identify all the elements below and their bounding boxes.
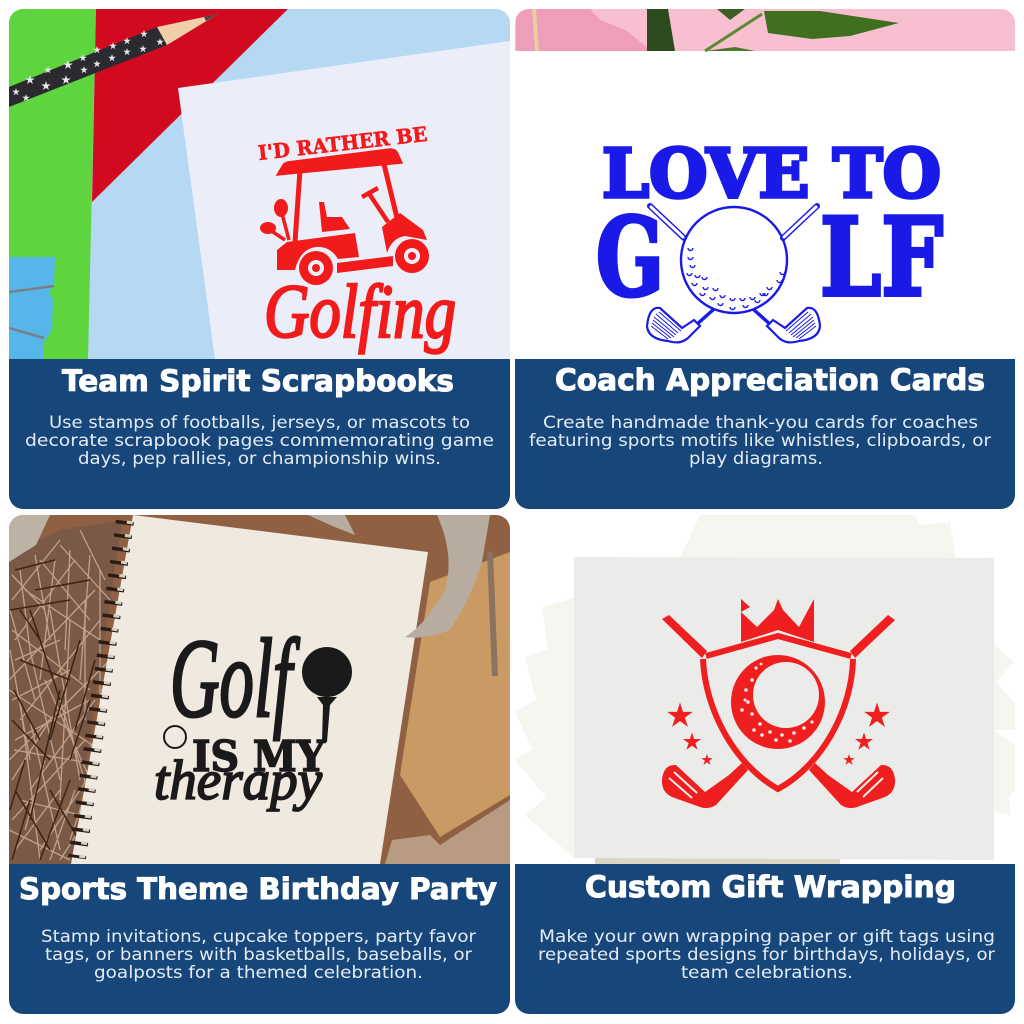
icon: stars bbox=[667, 702, 890, 765]
stamp: golf crest bbox=[662, 599, 895, 808]
description: play diagrams. bbox=[689, 448, 823, 468]
panel: sports theme birthday party bbox=[9, 515, 510, 1014]
notebook bbox=[71, 515, 428, 864]
stamp: love to golf bbox=[596, 134, 943, 342]
photo: card with love to golf stamp bbox=[515, 9, 1015, 359]
panel: coach appreciation cards bbox=[515, 9, 1015, 509]
stamp text: Golfing: Golfing bbox=[264, 270, 456, 354]
speckled ground below envelope bbox=[385, 800, 510, 864]
stacked cards bbox=[515, 515, 1015, 864]
description: team celebrations. bbox=[681, 962, 853, 982]
icon: club heads bbox=[662, 763, 895, 808]
description: Create handmade thank-you cards for coaches bbox=[543, 412, 978, 432]
heading: Coach Appreciation Cards bbox=[555, 363, 985, 397]
description bbox=[25, 412, 494, 468]
icon: small golf ball bbox=[164, 726, 186, 748]
description: goalposts for a themed celebration. bbox=[94, 962, 423, 982]
caption band bbox=[515, 359, 1015, 509]
heading: Sports Theme Birthday Party bbox=[19, 872, 497, 906]
kraft envelope bbox=[400, 552, 510, 837]
stamp text: G: G bbox=[596, 195, 664, 321]
description: decorate scrapbook pages commemorating game bbox=[25, 430, 494, 450]
description bbox=[529, 412, 991, 468]
stamp text: therapy: therapy bbox=[154, 750, 322, 812]
stamp text: LOVE TO: LOVE TO bbox=[602, 134, 941, 213]
photo: stationery with golf cart stamp bbox=[9, 9, 510, 359]
caption band bbox=[515, 864, 1015, 1014]
photo: notebook on wood with golf stamp bbox=[9, 515, 510, 864]
stamp: I'd rather be golfing bbox=[257, 122, 456, 354]
icon: crossed golf clubs bbox=[647, 206, 820, 342]
description: Stamp invitations, cupcake toppers, party favor bbox=[41, 926, 476, 946]
icon: golf ball bbox=[681, 207, 787, 313]
description bbox=[41, 926, 476, 982]
description: days, pep rallies, or championship wins. bbox=[78, 448, 441, 468]
description: featuring sports motifs like whistles, clipboards, or bbox=[529, 430, 991, 450]
stamp text: IS MY: IS MY bbox=[192, 732, 326, 781]
caption band bbox=[9, 864, 510, 1014]
icon: golf ball crescent bbox=[731, 655, 825, 749]
panel: custom gift wrapping bbox=[515, 515, 1015, 1014]
description: repeated sports designs for birthdays, holidays, or bbox=[538, 944, 995, 964]
stamp text: I'D RATHER BE: I'D RATHER BE bbox=[257, 122, 428, 165]
icon: crown bbox=[741, 599, 814, 642]
description: tags, or banners with basketballs, baseballs, or bbox=[45, 944, 472, 964]
description: Make your own wrapping paper or gift tags using bbox=[539, 926, 995, 946]
icon: shield with shafts bbox=[662, 615, 895, 789]
stamp text: LF: LF bbox=[820, 195, 943, 321]
icon: blue binder clip bbox=[9, 257, 55, 359]
main card bbox=[574, 557, 994, 860]
photo: stack of cards with crest stamp bbox=[515, 515, 1015, 864]
dry grass bbox=[9, 515, 122, 864]
dried leaf bbox=[405, 515, 490, 638]
heading: Team Spirit Scrapbooks bbox=[62, 364, 454, 398]
description: Use stamps of footballs, jerseys, or mascots to bbox=[49, 412, 470, 432]
icon: golf cart bbox=[260, 149, 429, 285]
stamp: golf is my therapy bbox=[154, 617, 352, 812]
panel: team spirit scrapbooks bbox=[9, 9, 510, 509]
spiral binding bbox=[77, 521, 130, 858]
icon: star pencil bbox=[9, 14, 218, 107]
description bbox=[538, 926, 995, 982]
caption band bbox=[9, 359, 510, 509]
heading: Custom Gift Wrapping bbox=[585, 870, 956, 904]
icon: ball on tee bbox=[302, 647, 352, 742]
stamp text: Golf: Golf bbox=[170, 617, 301, 741]
flower and leaves bbox=[516, 9, 899, 51]
